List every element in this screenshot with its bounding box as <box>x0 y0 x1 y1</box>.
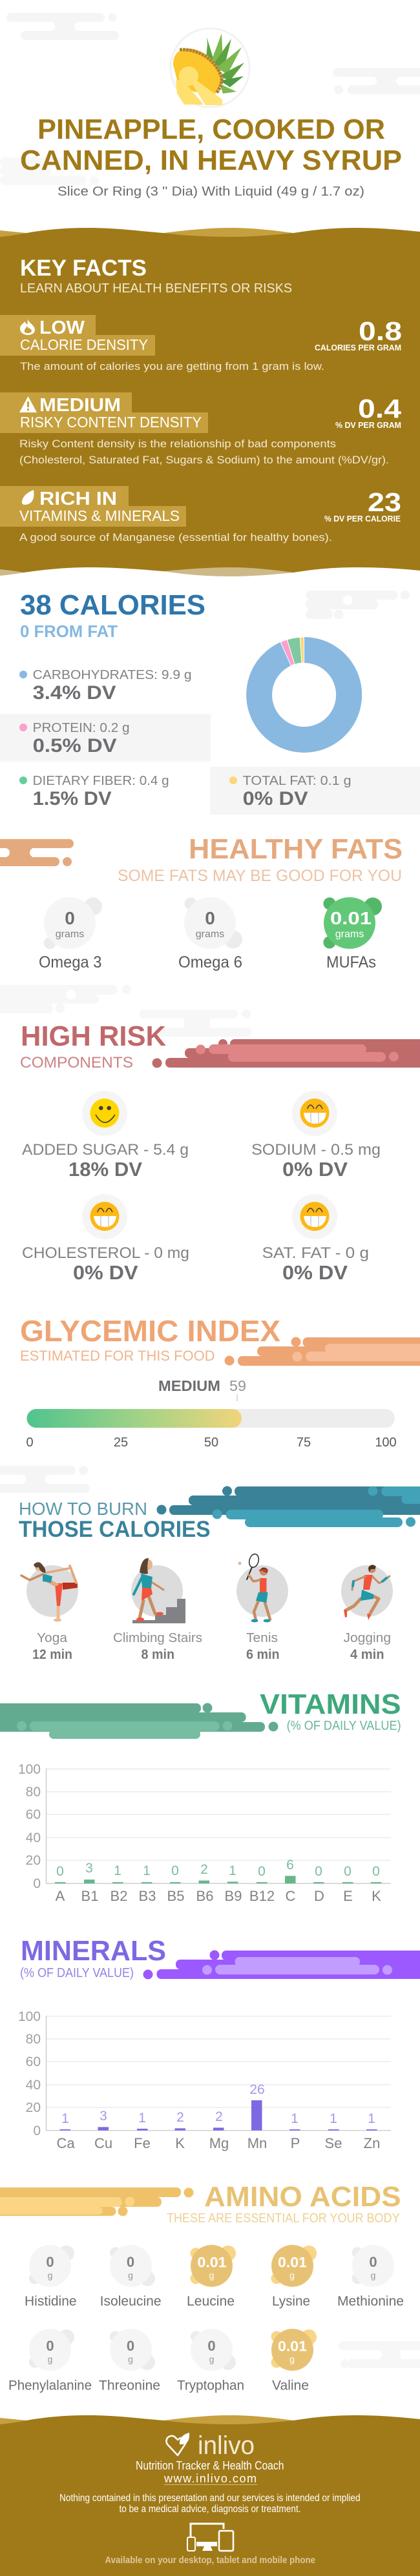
footer tagline: www.inlivo.com <box>163 2472 257 2485</box>
bar chart: minerals: 26 <box>249 2082 265 2097</box>
logo: inlivo <box>198 2431 255 2460</box>
panel: amino acids <box>0 2181 420 2393</box>
item: mufas: 0.01 <box>330 908 372 928</box>
panel: how to burn <box>0 1466 420 1662</box>
heading: how to burn: THOSE CALORIES <box>19 1517 211 1542</box>
glycemic value: 59 <box>229 1377 246 1394</box>
heading: vitamins: VITAMINS <box>260 1689 401 1720</box>
icon: grin <box>300 1099 330 1128</box>
icon: smiley <box>90 1099 119 1128</box>
serving size: Slice Or Ring (3 '' Dia) With Liquid (49 g / 1.7 oz) <box>58 184 364 199</box>
legend: total fat: 0% DV <box>243 788 308 809</box>
heading: vitamins <box>260 1689 401 1733</box>
glycemic scale: 100 <box>375 1435 397 1450</box>
item: isoleucine: Isoleucine <box>100 2294 162 2309</box>
item: omega 6: 0 <box>205 908 215 928</box>
panel: vitamins <box>0 1689 401 1904</box>
bar chart: minerals: Ca <box>57 2135 75 2151</box>
legend: total fat: TOTAL FAT: 0.1 g <box>243 773 352 788</box>
label: jogging: Jogging <box>344 1631 391 1645</box>
figure: climbing stairs <box>132 1558 185 1623</box>
bar chart: vitamins: 80 <box>26 1785 41 1800</box>
fact: vitamins and minerals: RICH IN <box>39 489 117 509</box>
bar chart: vitamins: B9 <box>225 1888 242 1904</box>
bar chart: vitamins: 3 <box>85 1861 93 1876</box>
activity: climbing stairs <box>113 1558 202 1662</box>
item: cholesterol: CHOLESTEROL - 0 mg <box>22 1244 189 1262</box>
bar chart: vitamins: 1 <box>143 1863 151 1878</box>
item: phenylalanine: g <box>48 2354 52 2364</box>
donut chart <box>246 637 362 753</box>
heading: amino acids <box>167 2181 401 2226</box>
legend: dietary fiber: DIETARY FIBER: 0.4 g <box>33 773 169 788</box>
title: PINEAPPLE, COOKED OR <box>37 114 385 145</box>
glycemic scale: 50 <box>204 1435 218 1450</box>
item: leucine: Leucine <box>187 2294 235 2309</box>
item: omega 3 <box>39 897 102 971</box>
decorative bars <box>0 839 74 866</box>
heading: minerals: MINERALS <box>21 1935 166 1967</box>
food image: pineapple <box>171 28 249 107</box>
item: histidine: 0 <box>46 2254 54 2270</box>
bar chart: vitamins: 0 <box>258 1864 266 1879</box>
item: threonine: 0 <box>127 2338 134 2354</box>
icon: grin <box>90 1202 119 1231</box>
bar chart: vitamins: 0 <box>171 1863 179 1878</box>
activity: jogging <box>341 1565 393 1662</box>
bar chart: vitamins: B12 <box>249 1888 275 1904</box>
bar chart: minerals: 1 <box>291 2111 299 2126</box>
item: lysine: g <box>289 2270 295 2280</box>
bar chart: minerals: 1 <box>61 2111 69 2126</box>
bar chart: minerals: 60 <box>26 2054 41 2069</box>
bar chart: minerals: 100 <box>18 2009 41 2024</box>
bar chart: vitamins: E <box>343 1888 353 1904</box>
item: tryptophan: g <box>209 2354 214 2364</box>
panel: key facts <box>0 228 420 581</box>
bar chart: vitamins: 0 <box>315 1864 322 1879</box>
icon: warning triangle <box>19 396 37 412</box>
item: omega 3: grams <box>56 929 84 940</box>
fact: calorie density: CALORIE DENSITY <box>20 336 148 353</box>
item: omega 3: Omega 3 <box>39 953 102 971</box>
bar chart: vitamins: 0 <box>56 1864 64 1879</box>
panel: glycemic index <box>20 1314 420 1450</box>
disclaimer <box>59 2493 361 2515</box>
disclaimer: to be a medical advice, diagnosis or treatment. <box>119 2504 301 2515</box>
bar chart: minerals: 1 <box>138 2111 146 2125</box>
label: climbing stairs: 8 min <box>141 1647 174 1662</box>
fact: calorie density: LOW <box>39 318 85 338</box>
glycemic scale: 0 <box>26 1435 34 1450</box>
item: leucine: 0.01 <box>198 2254 226 2271</box>
item: mufas <box>323 897 382 971</box>
legend: protein: PROTEIN: 0.2 g <box>33 720 130 735</box>
bar chart: minerals: Zn <box>364 2135 380 2151</box>
legend: carbohydrates: 3.4% DV <box>33 682 116 704</box>
item: omega 3: 0 <box>65 908 75 928</box>
label: tennis <box>246 1631 279 1662</box>
glycemic value <box>158 1377 246 1401</box>
bar chart: vitamins: 40 <box>26 1831 41 1845</box>
label: climbing stairs: Climbing Stairs <box>113 1631 202 1645</box>
bar chart: minerals: 20 <box>26 2100 41 2115</box>
bar chart: minerals: Fe <box>134 2135 151 2151</box>
heading: glycemic index: ESTIMATED FOR THIS FOOD <box>20 1348 215 1364</box>
item: threonine: Threonine <box>99 2378 160 2393</box>
item: leucine <box>187 2245 236 2309</box>
fact: calorie density <box>0 315 402 372</box>
bar chart: vitamins: 0 <box>372 1864 380 1879</box>
label: climbing stairs <box>113 1631 202 1662</box>
label: yoga: 12 min <box>32 1647 72 1662</box>
heading: healthy fats: SOME FATS MAY BE GOOD FOR YOU <box>118 867 402 885</box>
bar chart: vitamins: 6 <box>286 1858 294 1872</box>
item: methionine: 0 <box>369 2254 377 2270</box>
glycemic scale: 25 <box>114 1435 128 1450</box>
heading: healthy fats <box>118 833 403 885</box>
bar chart: minerals: Mn <box>247 2135 267 2151</box>
heading: high risk: COMPONENTS <box>20 1054 133 1071</box>
item: valine <box>271 2329 317 2393</box>
item: isoleucine <box>100 2245 162 2309</box>
fact: vitamins and minerals: % DV PER CALORIE <box>324 514 401 523</box>
title: CANNED, IN HEAVY SYRUP <box>20 145 402 176</box>
label: tennis: Tenis <box>246 1631 278 1645</box>
bar chart: minerals: 1 <box>368 2111 375 2126</box>
bar chart: minerals: 3 <box>100 2109 107 2124</box>
icon: grin <box>300 1202 330 1231</box>
heading: healthy fats: HEALTHY FATS <box>189 833 403 865</box>
item: saturated fat: 0% DV <box>282 1261 348 1284</box>
heading: key facts: LEARN ABOUT HEALTH BENEFITS OR RISKS <box>20 281 292 296</box>
bar chart: vitamins: C <box>286 1888 296 1904</box>
panel: healthy fats <box>0 833 403 971</box>
decorative bars <box>156 1486 420 1527</box>
legend: total fat <box>210 767 420 815</box>
decorative bars <box>152 1039 420 1068</box>
label: jogging: 4 min <box>350 1647 384 1662</box>
fact: risky content density: 0.4 <box>358 394 401 423</box>
fact: risky content density: MEDIUM <box>39 395 121 416</box>
item: histidine: Histidine <box>25 2294 77 2309</box>
bar chart: minerals: K <box>175 2135 185 2151</box>
bar chart: vitamins: 2 <box>200 1862 208 1877</box>
glycemic scale <box>26 1435 397 1450</box>
activity: yoga <box>21 1562 78 1662</box>
heading: key facts: KEY FACTS <box>20 256 147 281</box>
item: tryptophan <box>177 2329 244 2393</box>
legend: carbohydrates <box>19 667 192 704</box>
heading: calories: 0 FROM FAT <box>20 622 118 641</box>
bar chart: minerals: Se <box>325 2135 342 2151</box>
bar chart: vitamins: B5 <box>167 1888 184 1904</box>
item: valine: Valine <box>272 2378 309 2393</box>
decorative bars <box>0 1703 278 1739</box>
bar chart: vitamins: K <box>372 1888 381 1904</box>
item: tryptophan: 0 <box>207 2338 216 2354</box>
heading: how to burn: HOW TO BURN <box>19 1499 147 1519</box>
icon: flame <box>20 318 35 335</box>
fact: risky content density <box>0 392 401 466</box>
label: yoga <box>32 1631 72 1662</box>
header panel <box>0 13 420 199</box>
bar chart: vitamins: 0 <box>344 1864 352 1879</box>
heading: glycemic index: GLYCEMIC INDEX <box>20 1314 280 1348</box>
decorative bars <box>143 1951 420 1979</box>
item: cholesterol <box>22 1194 189 1284</box>
footer tagline <box>136 2459 284 2485</box>
item: omega 6: Omega 6 <box>178 953 242 971</box>
item: mufas: MUFAs <box>326 953 376 971</box>
bar chart: vitamins: 100 <box>18 1762 41 1777</box>
bar chart: vitamins: D <box>314 1888 324 1904</box>
item: cholesterol: 0% DV <box>73 1261 138 1284</box>
icon: devices <box>187 2524 233 2551</box>
item: omega 6 <box>178 897 242 971</box>
decorative bars <box>225 1337 420 1366</box>
panel: footer <box>0 2415 420 2576</box>
item: lysine <box>271 2245 317 2309</box>
fact: risky content density: RISKY CONTENT DENSITY <box>20 414 202 431</box>
panel: minerals <box>18 1935 420 2151</box>
fact: calorie density: The amount of calories you are getting from 1 gram is low. <box>20 361 324 372</box>
item: saturated fat: SAT. FAT - 0 g <box>262 1244 369 1262</box>
item: threonine: g <box>128 2354 133 2364</box>
figure: tennis <box>238 1553 270 1623</box>
fact: vitamins and minerals: 23 <box>368 487 401 517</box>
heading: vitamins: (% OF DAILY VALUE) <box>287 1719 401 1733</box>
item: saturated fat <box>262 1194 369 1284</box>
item: added sugar <box>22 1091 189 1181</box>
logo <box>166 2431 255 2460</box>
bar chart: vitamins: 60 <box>26 1807 41 1822</box>
item: omega 6: grams <box>196 929 224 940</box>
legend: dietary fiber: 1.5% DV <box>33 788 112 809</box>
fact: vitamins and minerals: A good source of Manganese (essential for healthy bones). <box>19 532 332 543</box>
bar chart: minerals: Mg <box>209 2135 229 2151</box>
bar chart: vitamins: B6 <box>196 1888 213 1904</box>
fact: risky content density: Risky Content density is the relationship of bad components <box>19 438 336 450</box>
heading: amino acids: AMINO ACIDS <box>204 2181 401 2213</box>
panel: high risk components <box>0 985 420 1284</box>
label: jogging <box>344 1631 391 1662</box>
bar chart: minerals: 2 <box>176 2110 184 2125</box>
item: phenylalanine: 0 <box>46 2338 54 2354</box>
bar chart: minerals: 40 <box>26 2078 41 2093</box>
item: mufas: grams <box>335 929 364 940</box>
fact: vitamins and minerals: VITAMINS & MINERALS <box>19 507 180 524</box>
bar chart: vitamins <box>18 1762 391 1904</box>
bar chart: vitamins: B3 <box>139 1888 156 1904</box>
bar chart: vitamins: 1 <box>114 1863 121 1878</box>
item: tryptophan: Tryptophan <box>177 2378 244 2393</box>
bar chart: minerals <box>18 2009 391 2151</box>
bar chart: minerals: P <box>291 2135 300 2151</box>
bar chart: vitamins: 1 <box>229 1863 236 1878</box>
heading: glycemic index <box>20 1314 280 1364</box>
bar chart: vitamins: A <box>56 1888 65 1904</box>
fact: vitamins and minerals <box>0 486 401 543</box>
activity: tennis <box>236 1553 288 1662</box>
bar chart: minerals: 2 <box>215 2109 223 2124</box>
heading: minerals: (% OF DAILY VALUE) <box>20 1966 134 1980</box>
figure: jogging <box>344 1565 390 1620</box>
heading: high risk <box>20 1021 167 1071</box>
bar chart: vitamins: 20 <box>26 1853 41 1868</box>
bar chart: minerals: Cu <box>94 2135 112 2151</box>
item: methionine: g <box>371 2270 375 2280</box>
panel: calories <box>0 590 420 815</box>
item: sodium: SODIUM - 0.5 mg <box>251 1141 381 1159</box>
item: sodium <box>251 1091 381 1181</box>
decorative bars <box>0 2187 194 2216</box>
heading: key facts <box>20 256 292 296</box>
item: methionine <box>337 2245 404 2309</box>
item: histidine: g <box>48 2270 52 2280</box>
bar chart: minerals: 0 <box>33 2124 41 2138</box>
item: isoleucine: 0 <box>127 2254 134 2270</box>
footer tagline: Nutrition Tracker & Health Coach <box>136 2459 284 2472</box>
fact: calorie density: 0.8 <box>359 316 402 346</box>
legend: protein: 0.5% DV <box>33 735 117 756</box>
item: valine: 0.01 <box>278 2338 307 2355</box>
glycemic scale: 75 <box>297 1435 311 1450</box>
title <box>20 114 402 176</box>
item: sodium: 0% DV <box>282 1158 348 1181</box>
item: lysine: 0.01 <box>278 2254 307 2271</box>
item: leucine: g <box>209 2270 214 2280</box>
glycemic value: MEDIUM <box>158 1377 220 1394</box>
bar chart: minerals: 80 <box>26 2032 41 2047</box>
heading: calories <box>20 590 205 641</box>
item: methionine: Methionine <box>337 2294 404 2309</box>
figure: yoga <box>21 1562 78 1621</box>
disclaimer: Nothing contained in this presentation and our services is intended or implied <box>59 2493 361 2504</box>
label: tennis: 6 min <box>246 1647 279 1662</box>
fact: risky content density: % DV PER GRAM <box>335 420 401 430</box>
item: histidine <box>25 2245 77 2309</box>
bar chart: vitamins: 0 <box>33 1876 41 1891</box>
heading: calories: 38 CALORIES <box>20 590 205 621</box>
fact: calorie density: CALORIES PER GRAM <box>315 343 401 352</box>
item: threonine <box>99 2329 160 2393</box>
glycemic bar <box>27 1409 395 1428</box>
label: yoga: Yoga <box>37 1631 68 1645</box>
heading: how to burn <box>19 1499 211 1542</box>
legend: carbohydrates: CARBOHYDRATES: 9.9 g <box>33 667 192 682</box>
item: valine: g <box>289 2354 295 2364</box>
heading: minerals <box>20 1935 166 1980</box>
fact: risky content density: (Cholesterol, Saturated Fat, Sugars & Sodium) to the amount (%DV/gr). <box>19 454 389 466</box>
item: added sugar: ADDED SUGAR - 5.4 g <box>22 1141 189 1159</box>
legend: dietary fiber <box>19 773 169 809</box>
item: added sugar: 18% DV <box>68 1158 142 1181</box>
legend: protein <box>0 714 211 762</box>
item: phenylalanine <box>8 2329 92 2393</box>
item: isoleucine: g <box>128 2270 133 2280</box>
item: lysine: Lysine <box>272 2294 310 2309</box>
icon: leaf <box>22 490 34 505</box>
bar chart: vitamins: B1 <box>81 1888 98 1904</box>
availability note: Available on your desktop, tablet and mobile phone <box>105 2555 315 2566</box>
bar chart: minerals: 1 <box>330 2111 337 2126</box>
item: phenylalanine: Phenylalanine <box>8 2378 92 2393</box>
heading: high risk: HIGH RISK <box>21 1021 167 1052</box>
bar chart: vitamins: B2 <box>110 1888 127 1904</box>
